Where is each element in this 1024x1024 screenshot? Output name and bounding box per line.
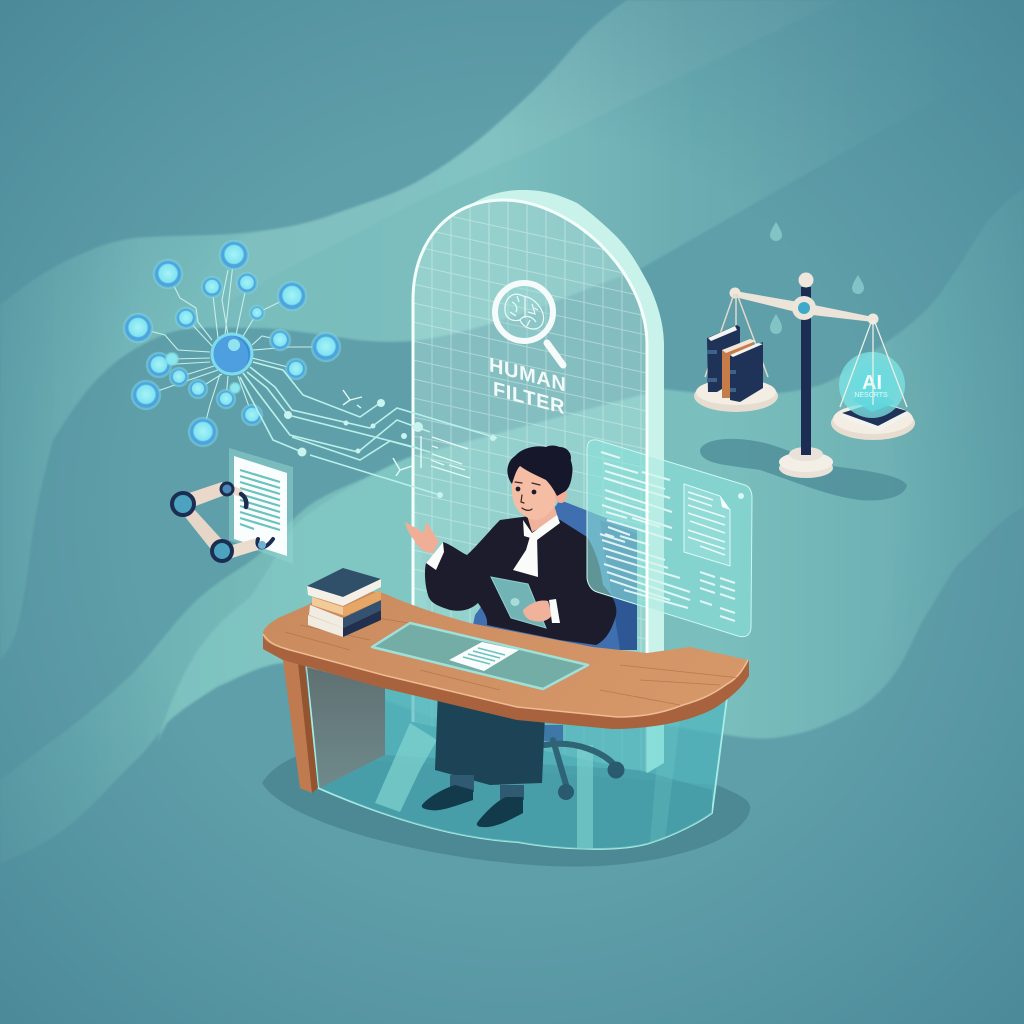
arch shaped glass filter panel (413, 190, 664, 780)
scale post (801, 287, 811, 455)
document lines (240, 470, 280, 530)
circuit traces (240, 362, 497, 498)
network nodes (124, 241, 340, 446)
book stack (307, 568, 381, 637)
top book (307, 568, 381, 597)
modesty panel (307, 667, 385, 788)
raised hand (405, 522, 439, 553)
left book blue (707, 325, 740, 392)
third book (309, 605, 343, 628)
ear (555, 487, 567, 503)
face (512, 460, 558, 520)
collar and jabot (513, 515, 560, 577)
chair base (543, 725, 624, 800)
facial features (515, 482, 540, 510)
desk highlight (263, 634, 748, 717)
panel glass (587, 440, 752, 637)
document page (234, 456, 287, 556)
right pan with AI bubble: AI (862, 372, 882, 394)
scale base (779, 447, 833, 478)
neck (526, 505, 558, 532)
panel text lines (600, 452, 735, 621)
scale beam (735, 291, 873, 322)
network lines (138, 255, 326, 432)
right pan with AI bubble (831, 320, 915, 440)
human filter label: FILTER (493, 378, 565, 419)
orange book (722, 340, 753, 398)
AI orb (839, 352, 905, 418)
magnifier with brain icon (495, 283, 563, 365)
arch grid (413, 190, 660, 780)
desk paper (449, 642, 519, 671)
holding hand (523, 600, 552, 622)
grippers (241, 494, 246, 507)
chair back (470, 500, 637, 650)
brain (505, 294, 544, 329)
navy book (730, 342, 763, 402)
robe upper body (425, 516, 616, 645)
glass lines text (343, 390, 470, 478)
arch white outline (413, 200, 647, 773)
droplets (770, 222, 864, 334)
document backing glass (229, 448, 293, 564)
panel document icon (684, 484, 730, 566)
glass light streaks (375, 723, 437, 812)
desk leg and glass enclosure (283, 660, 728, 850)
orange book (312, 590, 381, 616)
arch front pane (413, 200, 647, 773)
human filter label (489, 354, 566, 419)
glass front (307, 667, 728, 849)
arm segments (183, 482, 225, 507)
desk top (263, 568, 749, 729)
desk shadow (262, 755, 750, 867)
shoes (422, 785, 473, 810)
hair (507, 446, 573, 496)
circuit nodes (284, 399, 496, 498)
desk leg (283, 660, 312, 793)
bottom book (308, 615, 343, 637)
desk surface (263, 588, 748, 717)
book under orb (842, 402, 907, 426)
desk top edge (263, 632, 749, 729)
glass floor shade (320, 755, 712, 849)
human filter label: HUMAN (489, 354, 566, 397)
robot arm holding document (172, 448, 293, 564)
scale shadow (700, 439, 907, 500)
neural network cluster (124, 241, 340, 446)
left cuff (426, 542, 444, 570)
arm joints (172, 493, 194, 515)
network hub (212, 334, 252, 374)
arch edge over panel (647, 430, 664, 700)
judge (405, 446, 616, 827)
desk mat (372, 623, 588, 689)
robe lower body (435, 690, 545, 785)
balance scale (694, 222, 915, 478)
arch base edge (647, 700, 664, 773)
tablet (491, 577, 546, 628)
right pan with AI bubble: NESCRTS (854, 392, 888, 399)
left pan with books (694, 294, 778, 412)
floating data panel (587, 440, 752, 637)
arch thick edge (470, 190, 664, 773)
wood grain (285, 610, 740, 705)
socks (450, 775, 524, 800)
